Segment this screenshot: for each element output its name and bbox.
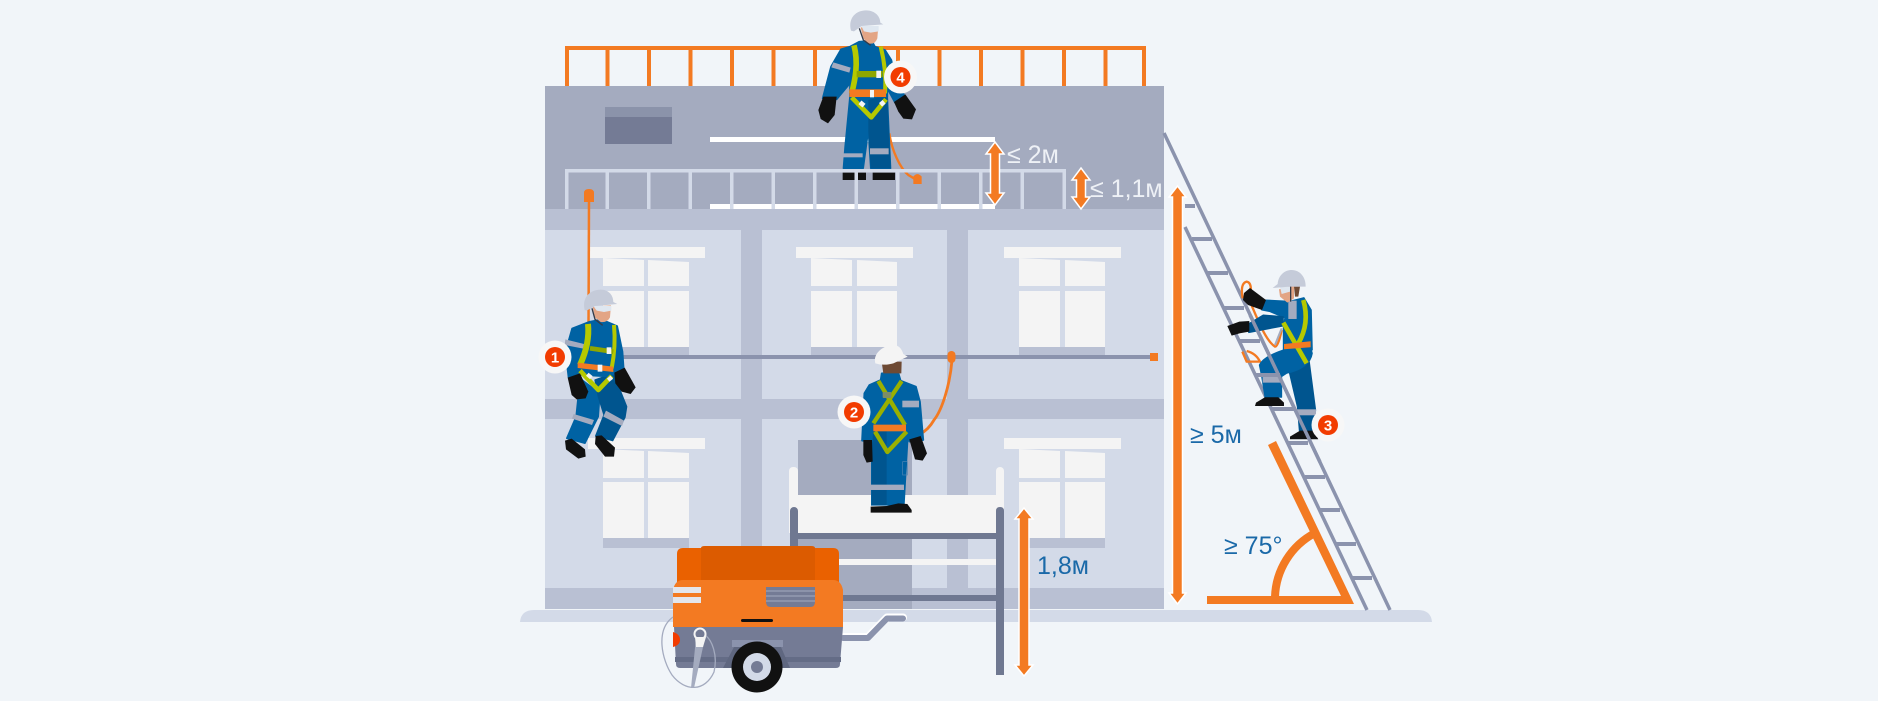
roof white hatch lines [710, 137, 995, 209]
badge 1: 1 [551, 350, 559, 366]
worker 4 on roof [818, 10, 922, 184]
label: 1.1 m: ≤ 1,1м [1090, 175, 1163, 203]
lanyard of worker 2 with anchor [920, 351, 956, 434]
horizontal anchor line [620, 353, 1158, 361]
ladder rails over worker [1250, 315, 1320, 462]
upper window centre [796, 247, 913, 355]
badge 3 [1312, 408, 1344, 442]
badge 1 [538, 340, 572, 374]
badge 4: 4 [896, 70, 905, 86]
arrow: rail height [1072, 168, 1090, 209]
angle marker 75 degrees [1207, 441, 1354, 604]
label: 2 m: ≤ 2м [1007, 141, 1059, 169]
upper glove of worker 3 [1243, 288, 1266, 310]
orange roof guard rail [565, 46, 1146, 87]
upper window right [1004, 247, 1121, 355]
arrow: ladder height [1169, 186, 1186, 604]
label: 5 m: ≥ 5м [1190, 421, 1242, 449]
doorway [798, 440, 912, 609]
label: 1.8 m: 1,8м [1037, 552, 1089, 580]
roof vent box [605, 107, 672, 144]
worker 2 on scaffold [862, 345, 927, 513]
grey edge safety rail [565, 169, 1066, 209]
lower window left [588, 438, 705, 548]
badge 3: 3 [1324, 418, 1332, 434]
worker 1 hanging on lifeline [565, 290, 636, 459]
badge 2 [838, 396, 870, 428]
badge 4 [884, 60, 917, 94]
label: 75 degrees: ≥ 75° [1224, 532, 1282, 560]
badge 2: 2 [850, 404, 858, 422]
worker 3 climbing ladder [1227, 270, 1318, 439]
building [545, 86, 1164, 609]
compressor tow bar [843, 618, 903, 638]
scaffold [789, 467, 1004, 675]
ladder [1164, 133, 1390, 610]
air hose and jackhammer [662, 617, 715, 688]
compressor wheel [732, 642, 782, 692]
air compressor [673, 546, 843, 668]
arrow: roof hatch clearance [986, 142, 1004, 205]
lower window right [1004, 438, 1121, 548]
arrow: scaffold height [1015, 508, 1033, 676]
upper window left [590, 247, 705, 355]
ground strip [520, 610, 1432, 622]
vertical lifeline with roof anchor [584, 189, 594, 330]
